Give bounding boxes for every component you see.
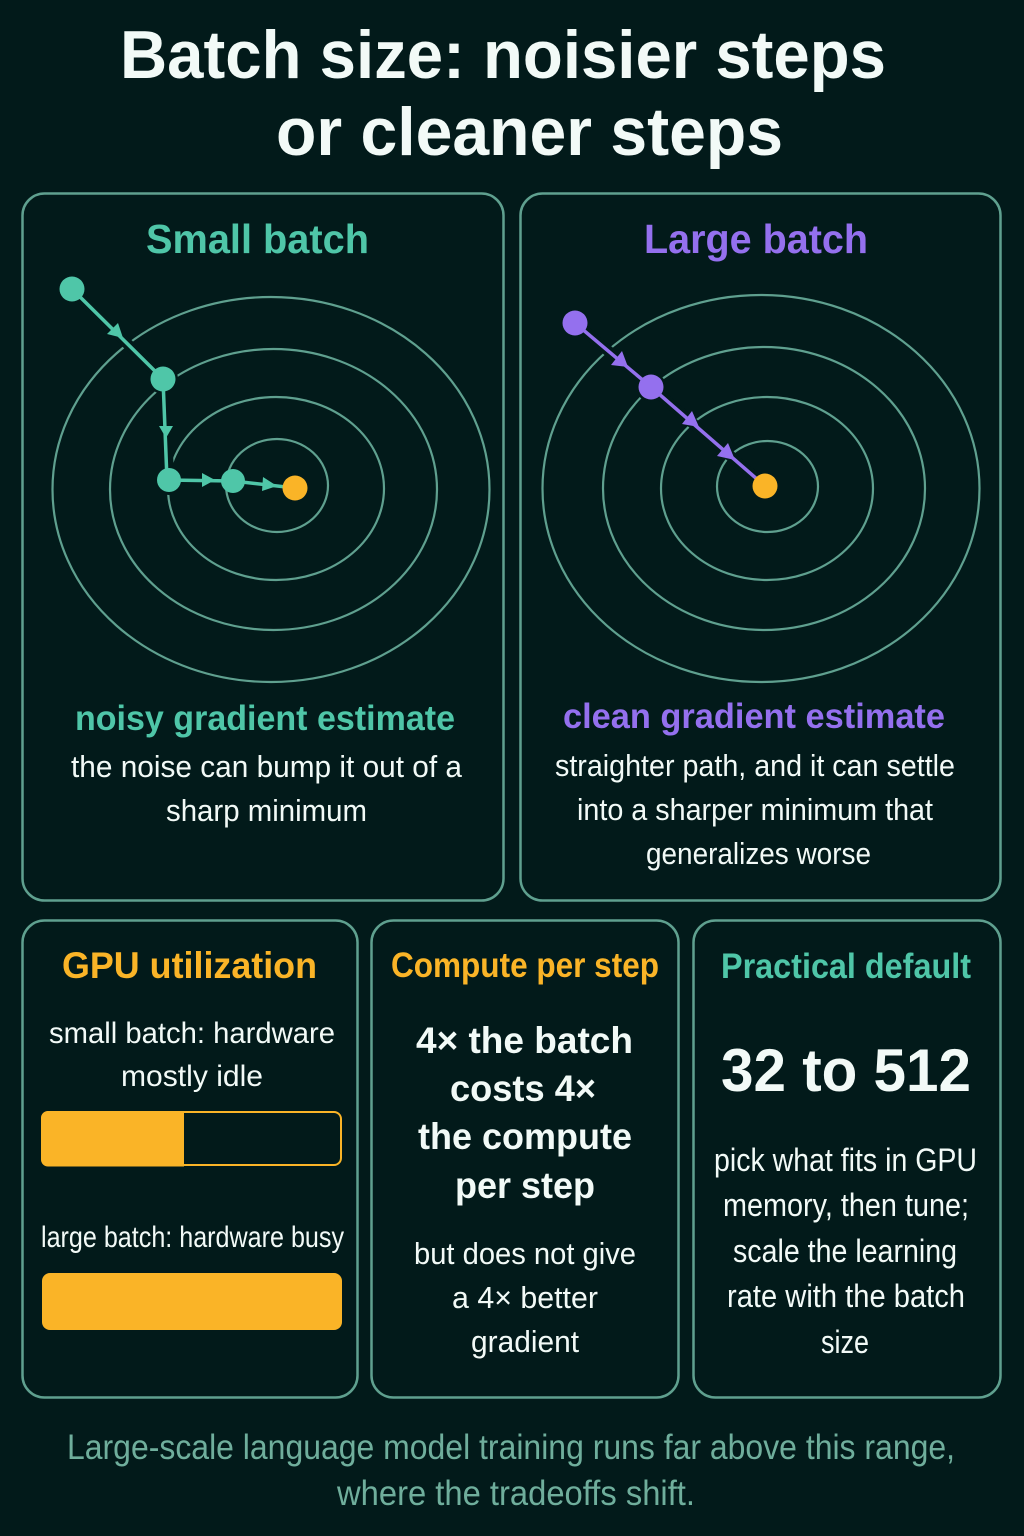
text: practical note: [714, 1142, 977, 1360]
bar: large batch utilization: [42, 1273, 342, 1330]
text: large batch note: into a sharper minimum that: [577, 792, 933, 827]
text: compute statement: [416, 1020, 633, 1206]
heading: practical default: Practical default: [721, 947, 971, 986]
bar: small batch utilization: [41, 1111, 341, 1166]
text: large batch note: generalizes worse: [646, 836, 871, 871]
chart: large batch straight path: [562, 310, 778, 498]
text: practical note: memory, then tune;: [723, 1187, 969, 1223]
text: small batch hardware: small batch: hardware: [49, 1017, 335, 1050]
panel: compute per step: [372, 920, 678, 1398]
panel: practical default: [694, 920, 1000, 1398]
footer note: where the tradeoffs shift.: [336, 1474, 695, 1513]
text: compute note: but does not give: [414, 1236, 636, 1271]
subheading: noisy gradient estimate: noisy gradient estimate: [75, 699, 455, 738]
panel: GPU utilization: [22, 920, 358, 1398]
text: small batch note: [71, 749, 463, 828]
text: compute note: a 4× better: [452, 1280, 598, 1315]
text: large batch hardware: large batch: hardware busy: [41, 1221, 344, 1254]
heading: small batch: Small batch: [146, 216, 369, 262]
title: or cleaner steps: [276, 94, 783, 170]
title: Batch size: noisier steps: [120, 17, 886, 93]
text: compute statement: 4× the batch: [416, 1020, 633, 1061]
text: large batch note: straighter path, and it can settle: [555, 748, 955, 783]
stat: batch range: 32 to 512: [721, 1037, 971, 1104]
text: compute statement: per step: [455, 1165, 595, 1206]
text: practical note: rate with the batch: [727, 1278, 965, 1314]
panel: large batch: [520, 194, 1000, 900]
chart: small batch contours: [52, 297, 490, 682]
title: [120, 17, 886, 170]
chart: large batch contours: [542, 295, 980, 682]
heading: large batch: Large batch: [644, 216, 868, 262]
text: practical note: size: [821, 1324, 869, 1360]
chart: small batch noisy path: [60, 276, 308, 500]
text: large batch note: [555, 748, 955, 871]
footer note: [67, 1428, 955, 1513]
text: small batch hardware: [49, 1017, 335, 1093]
text: compute note: gradient: [471, 1324, 579, 1359]
text: compute statement: the compute: [418, 1116, 632, 1157]
subheading: clean gradient estimate: clean gradient estimate: [563, 697, 945, 736]
text: small batch note: the noise can bump it out of a: [71, 749, 463, 784]
text: practical note: scale the learning: [733, 1233, 957, 1269]
footer note: Large-scale language model training runs far above this range,: [67, 1428, 955, 1467]
text: small batch hardware: mostly idle: [121, 1060, 263, 1093]
panel: small batch: [22, 194, 504, 900]
text: compute note: [414, 1236, 636, 1359]
text: practical note: pick what fits in GPU: [714, 1142, 977, 1178]
heading: compute per step: Compute per step: [391, 946, 659, 985]
heading: GPU utilization: GPU utilization: [62, 945, 317, 986]
text: small batch note: sharp minimum: [166, 793, 367, 828]
text: compute statement: costs 4×: [450, 1068, 596, 1109]
